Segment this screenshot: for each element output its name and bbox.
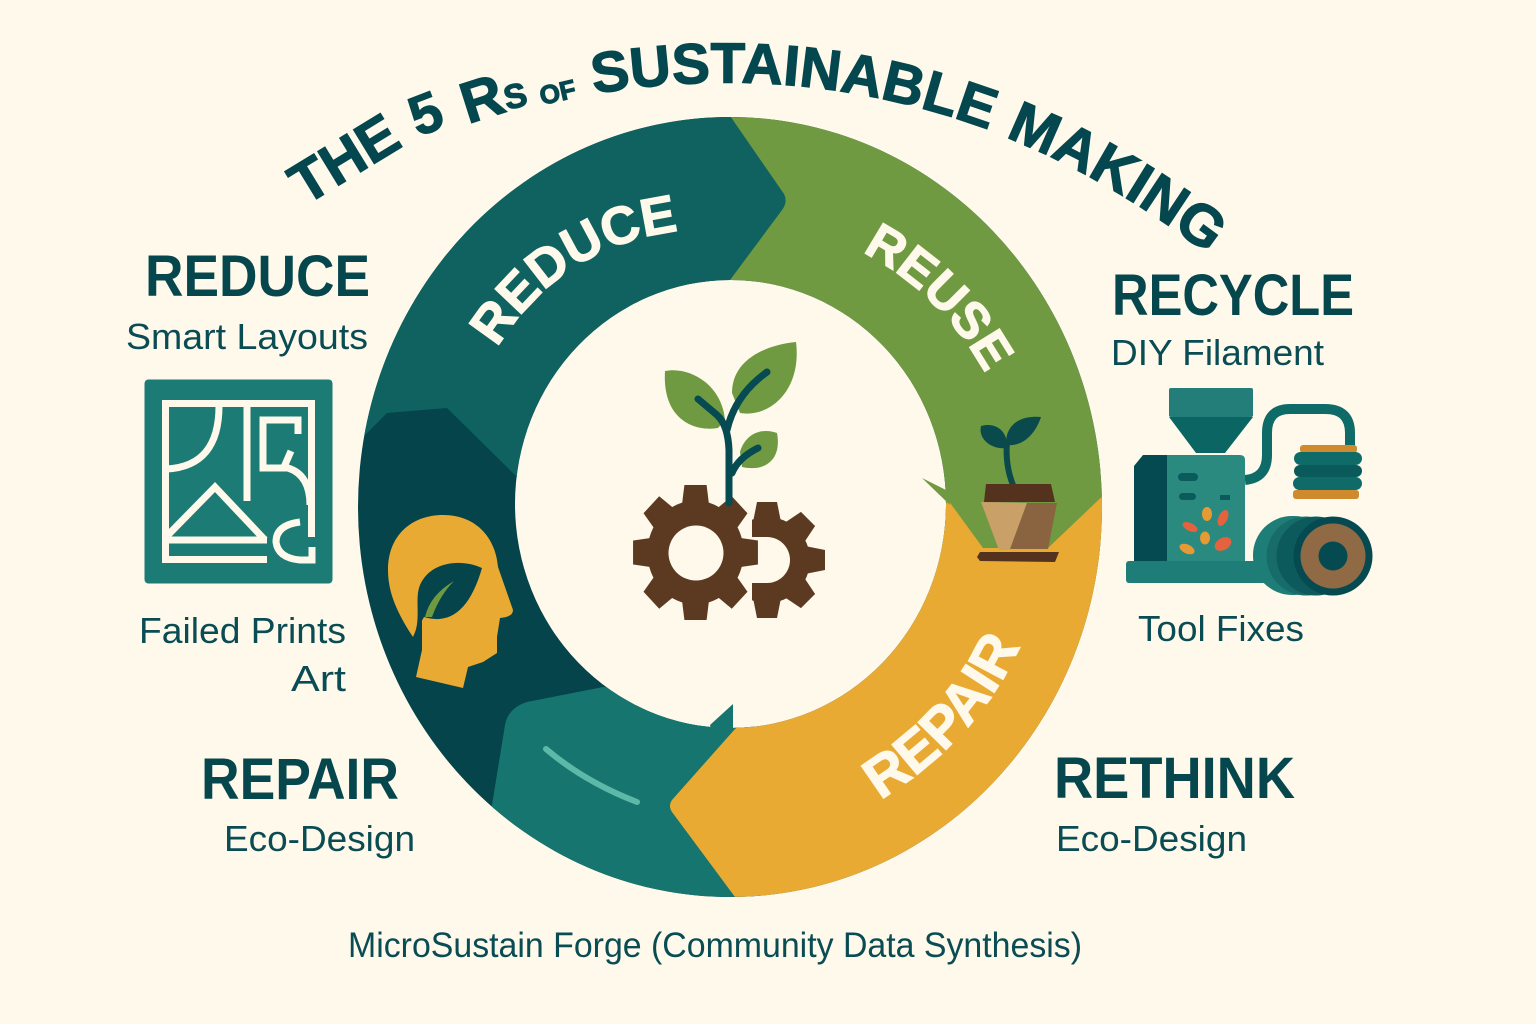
label: failed prints: Failed Prints [139, 610, 346, 651]
ring label: repair: REPAIR [860, 634, 1021, 799]
filament spool [1253, 516, 1333, 595]
title: MAKING [1008, 100, 1224, 248]
title: S [504, 83, 527, 109]
leaves [665, 342, 797, 468]
control slots [1178, 473, 1198, 481]
pellets [1202, 507, 1212, 521]
label: recycle: RECYCLE [1112, 263, 1354, 328]
title: THE [284, 112, 403, 200]
title: R [458, 77, 508, 124]
ring label: reuse: REUSE [864, 222, 1015, 372]
label: tool fixes: Tool Fixes [1138, 608, 1304, 649]
segment: reduce [364, 117, 786, 477]
icon: filament machine [1126, 388, 1372, 596]
segment: repair [670, 496, 1102, 897]
label: smart layouts: Smart Layouts [126, 316, 368, 357]
segment: rethink dark [340, 100, 1120, 920]
icon: seedling and gears [633, 342, 825, 630]
segment: reuse [730, 117, 1102, 560]
source line: MicroSustain Forge (Community Data Synthesis) [348, 926, 1082, 965]
label: eco-design left: Eco-Design [224, 818, 415, 859]
ring label: reduce: REDUCE [468, 194, 678, 346]
cycle ring [358, 117, 1102, 897]
pipe [1245, 409, 1350, 480]
label: art: Art [291, 658, 346, 699]
icon: floor plan [144, 380, 332, 584]
machine body [1134, 455, 1170, 561]
filament coil [1300, 445, 1357, 453]
green spike [922, 478, 950, 505]
hopper [1169, 388, 1253, 417]
title: 5 [407, 90, 443, 134]
title: OF [540, 79, 576, 104]
base [1126, 561, 1266, 583]
notch tip [710, 704, 733, 745]
icon: potted plant [977, 417, 1059, 562]
stems [698, 372, 767, 503]
big gear [633, 485, 758, 620]
segment: teal lower [492, 687, 760, 897]
icon: head with leaf [388, 515, 513, 688]
title: SUSTAINABLE [592, 42, 1000, 130]
label: reduce: REDUCE [145, 244, 370, 309]
title [284, 42, 1224, 248]
label: eco-design right: Eco-Design [1056, 818, 1247, 859]
label: diy filament: DIY Filament [1111, 332, 1324, 373]
highlight stroke [546, 749, 637, 802]
label: rethink: RETHINK [1054, 746, 1295, 811]
label: repair: REPAIR [201, 747, 399, 812]
small gear [716, 502, 825, 618]
